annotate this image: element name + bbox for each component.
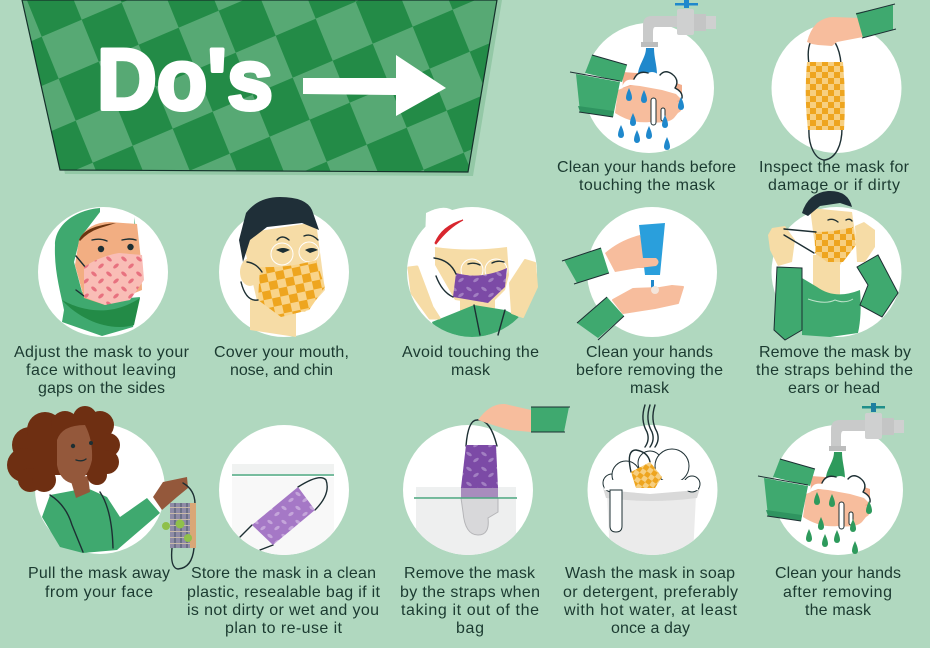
caption [563,565,738,637]
caption [14,344,190,397]
caption: once a day [611,620,690,637]
caption [214,344,349,379]
icon: tap and washing hands [570,0,716,150]
caption: Adjust the mask to your [14,344,190,361]
caption: Inspect the mask for [759,159,910,176]
caption: the straps behind the [756,362,913,379]
panel: clean hands before touching [557,0,736,194]
caption: after removing [783,584,892,601]
icon: woman holding contaminated mask [7,406,196,569]
panel: adjust the mask [14,207,190,397]
caption [402,344,539,379]
caption: is not dirty or wet and you [187,602,379,619]
panel: remove the mask from the bag [400,404,570,637]
icon: older woman, hands away from mask [409,208,537,345]
icon: bag with purple mask [414,404,570,559]
title: Do's [97,32,273,128]
caption: plastic, resealable bag if it [187,584,381,601]
icon: steaming bucket with suds and mask [603,405,700,556]
caption: Clean your hands before [557,159,736,176]
caption: face without leaving [26,362,176,379]
panel: cover mouth, nose and chin [214,197,349,379]
panel: clean hands before removing [562,207,723,397]
caption: Avoid touching the [402,344,539,361]
caption [775,565,901,619]
caption: the mask [805,602,872,619]
caption: Cover your mouth, [214,344,349,361]
caption [557,159,736,194]
caption: by the straps when [400,584,540,601]
panel: inspect the mask [759,4,910,194]
caption: or detergent, preferably [563,584,738,601]
icon: man lifting mask straps [768,191,898,340]
panel: store in a resealable bag [187,425,381,637]
panel: clean hands after removing [758,403,904,619]
caption: mask [630,380,670,397]
caption: with hot water, at least [563,602,738,619]
panel: pull the mask away [7,406,196,601]
caption: Remove the mask [404,565,536,582]
caption: nose, and chin [230,362,333,379]
icon: man with checked mask [239,197,325,337]
caption: gaps on the sides [38,380,165,397]
caption: Clean your hands [586,344,713,361]
caption [759,159,910,194]
arrow [303,55,446,116]
caption: touching the mask [579,177,716,194]
icon: hand holding checked mask [806,4,896,160]
caption: from your face [45,584,153,601]
caption: Store the mask in a clean [191,565,376,582]
caption: Remove the mask by [759,344,911,361]
caption: before removing the [576,362,723,379]
caption [756,344,913,397]
caption [576,344,723,397]
icon: mask in clear bag [232,464,334,557]
icon: woman in hijab [55,208,144,336]
caption: Pull the mask away [28,565,170,582]
caption: plan to re-use it [225,620,343,637]
caption: Clean your hands [775,565,901,582]
caption: Wash the mask in soap [565,565,735,582]
icon: tap and washing hands, green [758,403,904,554]
caption [187,565,381,637]
icon: hand squeezing sanitiser tube [562,223,683,340]
caption: bag [456,620,484,637]
banner: Do's heading [22,0,502,176]
caption: damage or if dirty [768,177,900,194]
caption: ears or head [788,380,880,397]
panel: wash the mask [563,405,738,637]
panel: remove by the straps [756,191,913,397]
caption: taking it out of the [401,602,539,619]
caption [28,565,170,601]
panel: avoid touching the mask [402,207,539,379]
caption [400,565,540,637]
caption: mask [451,362,491,379]
